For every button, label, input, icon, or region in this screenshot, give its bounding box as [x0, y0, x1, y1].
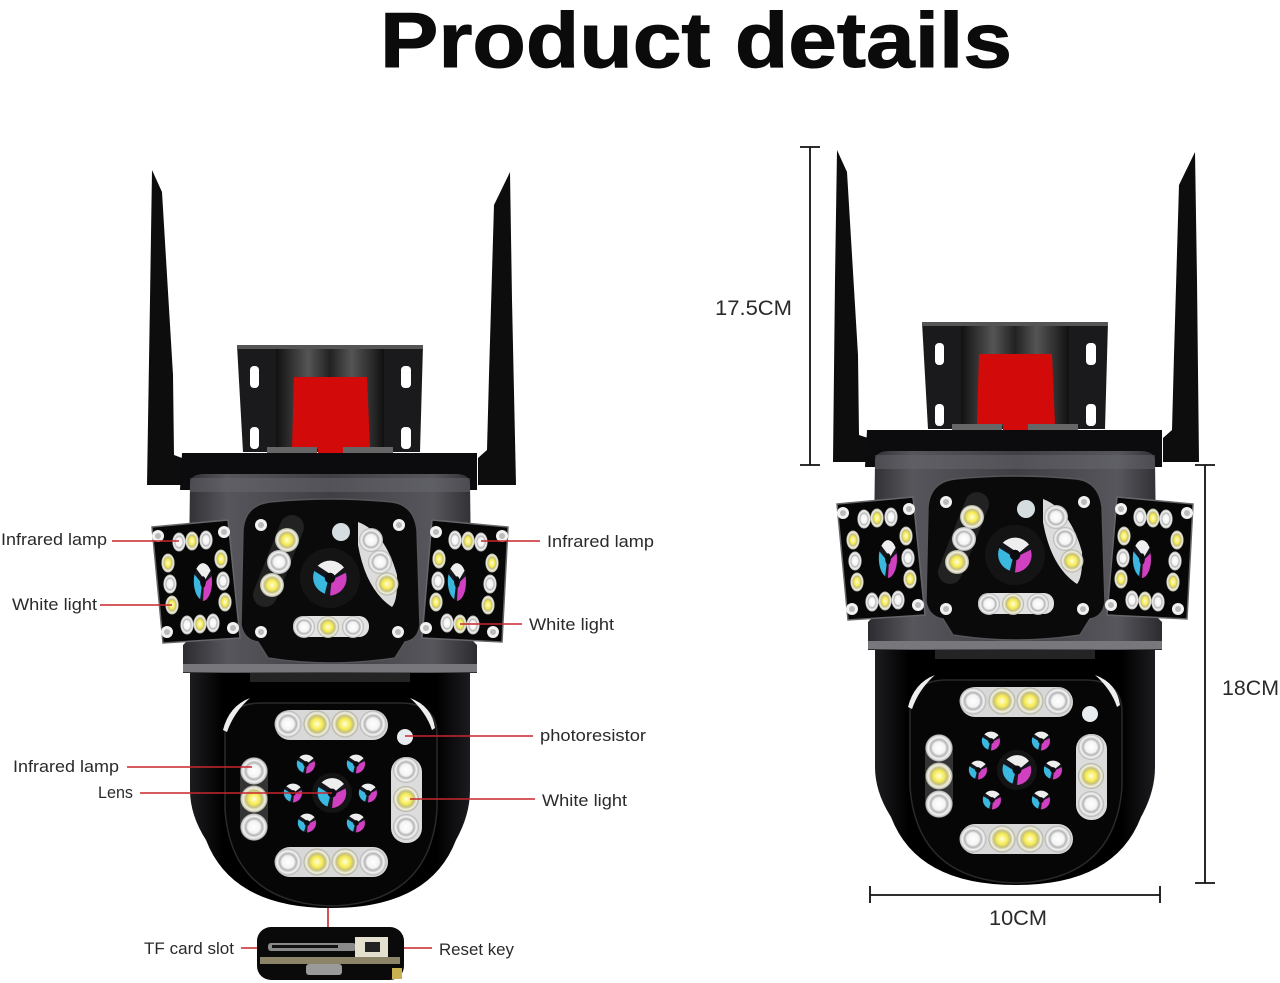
label: reset key: Reset key	[439, 941, 515, 959]
label: infrared lamp dome: Infrared lamp	[13, 758, 119, 776]
dimension: 18cm	[1195, 465, 1215, 883]
main lens	[300, 548, 360, 608]
label: tf card slot: TF card slot	[144, 940, 234, 958]
label: infrared lamp left top: Infrared lamp	[1, 531, 107, 549]
tf card module	[257, 927, 404, 980]
dome lights	[240, 710, 422, 877]
label: photoresistor: photoresistor	[540, 727, 647, 745]
callout lines	[100, 541, 540, 948]
dimension text: 17.5cm: 17.5CM	[715, 297, 792, 320]
label: lens: Lens	[98, 784, 133, 802]
mounting bracket	[237, 345, 423, 452]
dimension text: 10cm: 10CM	[989, 907, 1047, 930]
screws	[255, 519, 405, 638]
left camera antennas	[147, 170, 516, 485]
left camera	[152, 345, 508, 908]
left side panel	[152, 520, 240, 643]
right camera	[837, 322, 1193, 885]
grey upper body	[183, 474, 477, 673]
dimension: 10cm	[870, 886, 1160, 903]
dome lenses	[284, 754, 378, 832]
label: infrared lamp right: Infrared lamp	[547, 533, 654, 551]
crossbar	[180, 453, 477, 490]
red block	[292, 377, 370, 458]
label: white light right: White light	[529, 616, 614, 634]
dome	[190, 673, 470, 908]
dimension text: 18cm: 18CM	[1222, 677, 1279, 700]
front panel lights	[260, 522, 398, 638]
dimension: 17.5cm	[800, 147, 820, 465]
front panel	[241, 499, 420, 663]
label: white light left: White light	[12, 596, 97, 614]
label: white light dome: White light	[542, 792, 627, 810]
right camera antennas	[833, 150, 1199, 462]
right side panel	[420, 520, 508, 642]
